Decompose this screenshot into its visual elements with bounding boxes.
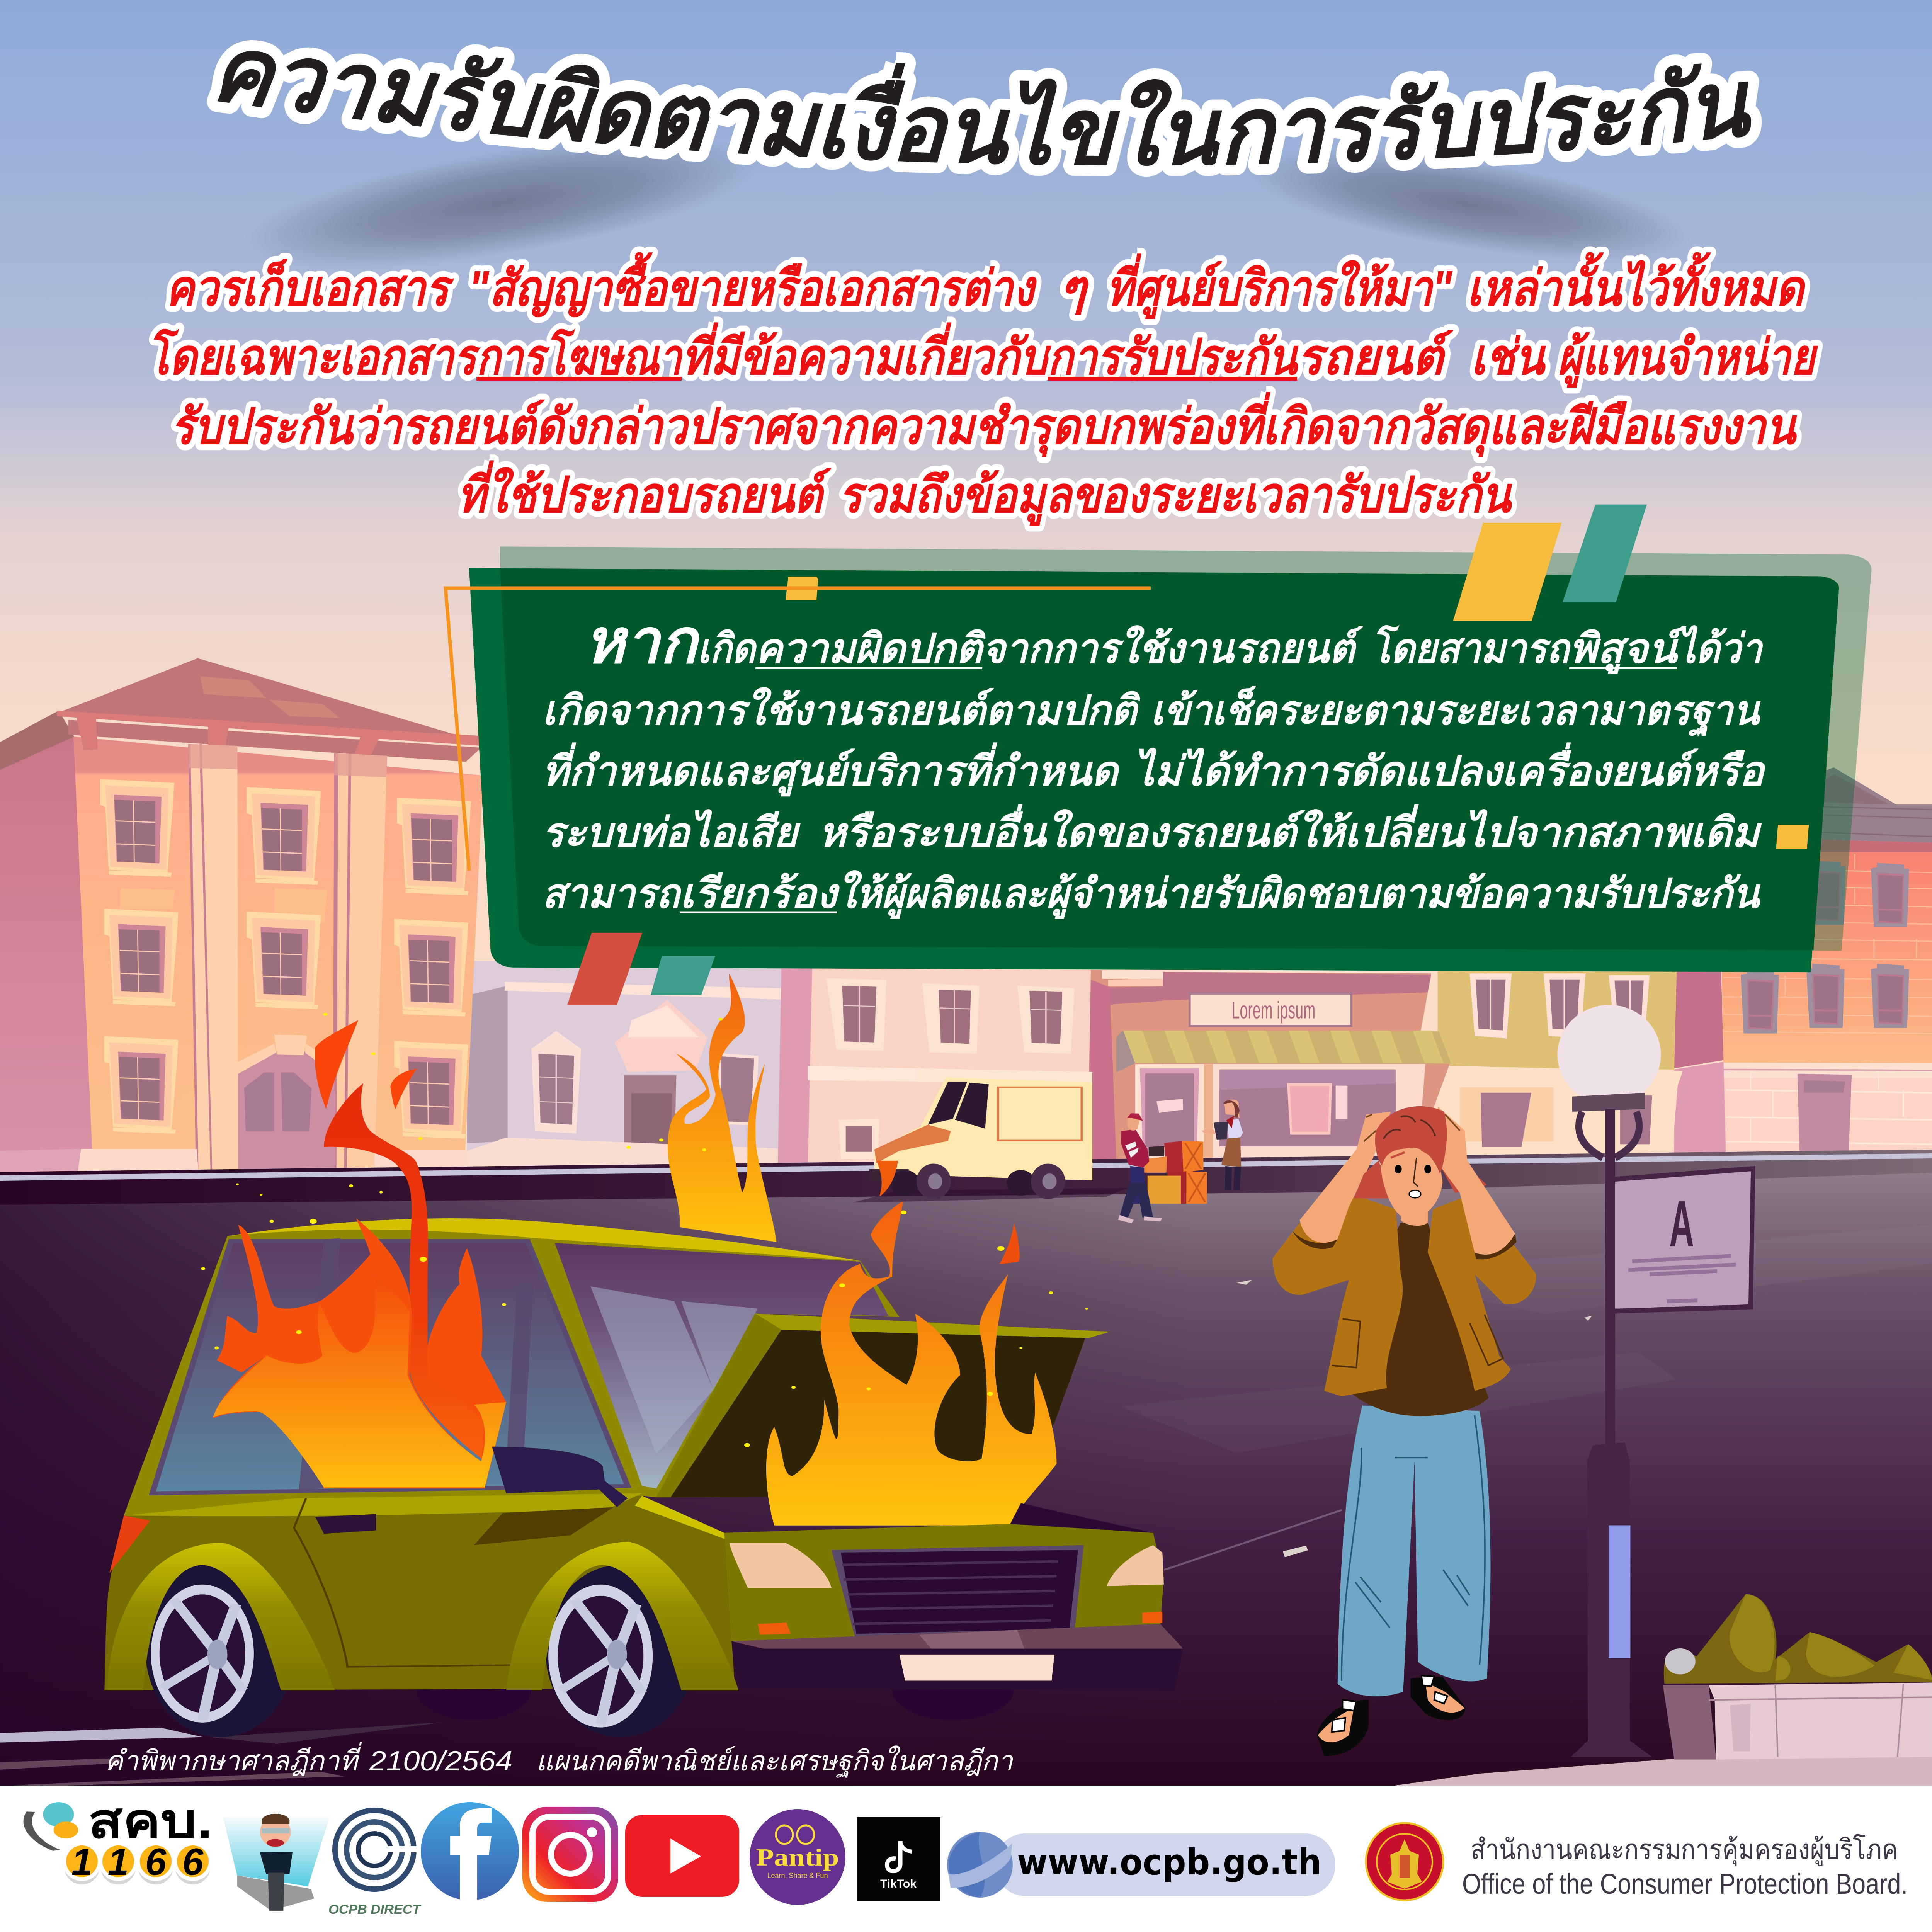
striped shop awning: [1116, 1031, 1451, 1072]
icon: tiktok: TikTok: [880, 1878, 917, 1890]
panel paragraph: ให้ผู้ผลิตและผู้จำหน่ายรับผิดชอบตามข้อความรับประกัน: [837, 870, 1761, 919]
red paragraph: ๆ: [1059, 261, 1089, 316]
flame behind the car roof: [668, 973, 776, 1242]
hair left side: [1354, 1160, 1391, 1199]
burning car: [104, 973, 1183, 1737]
icon: pantip: Pantip: [756, 1844, 839, 1871]
panel paragraph: เกิดจากการใช้งานรถยนต์ตามปกติ: [542, 687, 1141, 733]
panel paragraph: หาก: [584, 607, 700, 676]
flames on the engine: [766, 1202, 1056, 1526]
red slanted accent: [567, 933, 642, 1005]
delivery man with crates: [1121, 1113, 1207, 1204]
red paragraph: การโฆษณา: [476, 328, 683, 385]
panel paragraph: หรือระบบอื่นใดของรถยนต์ให้เปลี่ยนไปจากสภาพเดิม: [818, 804, 1762, 855]
label: OCPB DIRECT: OCPB DIRECT: [328, 1902, 422, 1917]
panel paragraph: จากการใช้งานรถยนต์: [982, 625, 1363, 672]
lamp post: [1558, 1005, 1661, 1757]
logo: hotline 1166: 1: [108, 1840, 129, 1883]
logo: hotline 1166: สคบ.: [88, 1794, 213, 1848]
red paragraph: เหล่านั้นไว้ทั้งหมด: [1467, 252, 1806, 316]
red paragraph: เช่น: [1471, 330, 1546, 385]
car cabin: [124, 1227, 900, 1515]
panel paragraph: ได้ว่า: [1677, 625, 1764, 672]
logo: OCPB circle: [335, 1810, 417, 1889]
red paragraph: รถยนต์: [1297, 330, 1454, 385]
side mirror: [492, 1447, 628, 1507]
website pill: www.ocpb.go.th: [1017, 1842, 1321, 1883]
title: ความรับผิดตามเงื่อนไขในการรับประกัน: [206, 15, 1755, 184]
grille: [832, 1545, 1084, 1637]
icon: pantip: Learn, Share & Fun: [767, 1872, 828, 1879]
agency name: [1462, 1833, 1908, 1900]
tyres behind: [417, 1661, 1014, 1720]
left apartment building: [0, 658, 483, 1173]
logo: hotline 1166: [28, 1794, 213, 1884]
red paragraph: รวมถึงข้อมูลของระยะเวลารับประกัน: [839, 468, 1512, 526]
woman holding her head: [1272, 1106, 1536, 1756]
shop left side with awning: [1088, 970, 1213, 1159]
court case citation: คำพิพากษาศาลฎีกาที่: [105, 1742, 362, 1777]
rear wheel: [107, 1543, 335, 1737]
headlights: [729, 1543, 1164, 1588]
bumper and number plate: [731, 1624, 1183, 1690]
front panel: [469, 568, 1839, 972]
delivery man legs: [1118, 1183, 1162, 1223]
icon: youtube: [625, 1815, 739, 1897]
road: [0, 1150, 1932, 1787]
side window: [152, 1241, 628, 1493]
red paragraph: ผู้แทนจำหน่าย: [1558, 330, 1818, 388]
planter: [1663, 1594, 1932, 1760]
website pill: [947, 1832, 1335, 1898]
panel paragraph: ความผิดปกติ: [755, 626, 986, 672]
court case citation: แผนกคดีพาณิชย์และเศรษฐกิจในศาลฎีกา: [536, 1745, 1014, 1778]
yellow slanted accent: [1453, 523, 1562, 621]
logo: OCPB Direct mascot: [223, 1814, 330, 1911]
bottom right sidewalk: [1392, 1750, 1932, 1786]
teal slanted accent lower: [651, 956, 715, 995]
red paragraph: [147, 252, 1818, 526]
road stripes at bottom left: [0, 1722, 444, 1786]
logo: hotline 1166: 6: [182, 1840, 204, 1883]
orange accent line: [446, 588, 1151, 871]
panel paragraph underlines: [680, 668, 1677, 912]
signboard: A: [1669, 1187, 1694, 1260]
title shadow: [235, 110, 1697, 296]
shoes: [1317, 1675, 1466, 1756]
yellow tab top: [786, 577, 818, 600]
delivery van: [853, 1070, 1128, 1202]
sparks: [201, 1013, 1088, 1447]
panel paragraph: สามารถ: [542, 871, 682, 917]
open hood: [656, 1313, 1110, 1497]
teal slanted accent: [1563, 505, 1647, 602]
panel paragraph: ระบบท่อไอเสีย: [542, 809, 801, 855]
panel paragraph: ไม่ได้ทำการดัดแปลงเครื่องยนต์หรือ: [1134, 742, 1766, 794]
panel paragraph: เกิด: [697, 626, 757, 672]
windshield: [555, 1243, 889, 1488]
yellow tab right: [1776, 825, 1809, 849]
street lamp, sign post and planter: [1558, 1005, 1932, 1760]
court case citation: [105, 1742, 1014, 1778]
car body: [104, 1496, 735, 1690]
woman with clipboard: [1201, 1100, 1243, 1190]
panel paragraph: [542, 607, 1766, 919]
emblem: OCPB seal: [1366, 1823, 1443, 1900]
red paragraph: โดยเฉพาะเอกสาร: [147, 328, 482, 385]
panel paragraph: เรียกร้อง: [680, 871, 840, 917]
red paragraph: ที่ใช้ประกอบรถยนต์: [457, 460, 832, 523]
shop sign: Lorem ipsum: Lorem ipsum: [1231, 997, 1315, 1024]
panel inner overlap: [500, 569, 1839, 950]
hair top: [1375, 1106, 1447, 1174]
icon: facebook: [421, 1802, 519, 1900]
panel paragraph: พิสูจน์: [1569, 626, 1687, 674]
shirt: [1350, 1223, 1488, 1416]
red paragraph underlines: [476, 377, 1297, 381]
icon: pantip: [750, 1809, 845, 1905]
middle buildings: lilac house and pink house: [467, 961, 1092, 1168]
panel paragraph: ที่กำหนดและศูนย์บริการที่กำหนด: [542, 742, 1120, 797]
jeans: [1338, 1405, 1490, 1696]
icon: instagram: [522, 1807, 618, 1902]
back panel: [500, 546, 1872, 951]
front wheel: [506, 1542, 738, 1737]
red paragraph: ที่ศูนย์บริการให้มา": [1106, 253, 1452, 319]
street buildings: shop, yellow house: [1159, 960, 1932, 1166]
red paragraph: การรับประกัน: [1048, 330, 1299, 385]
face: [1380, 1129, 1442, 1219]
court case citation: 2100/2564: [369, 1746, 512, 1777]
far right brick building: [1719, 767, 1932, 1078]
shop sign: Lorem ipsum: [1190, 993, 1351, 1026]
icon: tiktok: [857, 1817, 940, 1901]
red paragraph: "สัญญาซื้อขายหรือเอกสารต่าง: [469, 252, 1037, 318]
red paragraph: ควรเก็บเอกสาร: [166, 259, 454, 316]
signboard: [1612, 1168, 1753, 1311]
logo: hotline 1166: 6: [145, 1840, 167, 1883]
hair right side behind arm: [1440, 1155, 1487, 1193]
panel paragraph: เข้าเช็คระยะตามระยะเวลามาตรฐาน: [1151, 686, 1761, 737]
footer background: [0, 1786, 1932, 1932]
logo: hotline 1166: 1: [71, 1840, 92, 1883]
jacket: [1272, 1193, 1536, 1396]
red paragraph: ที่มีข้อความเกี่ยวกับ: [682, 322, 1051, 385]
panel paragraph: โดยสามารถ: [1371, 624, 1571, 672]
green text panel: [469, 505, 1839, 1005]
arms, neck and hands: [1300, 1106, 1515, 1255]
flames inside the cabin: [213, 1020, 506, 1488]
